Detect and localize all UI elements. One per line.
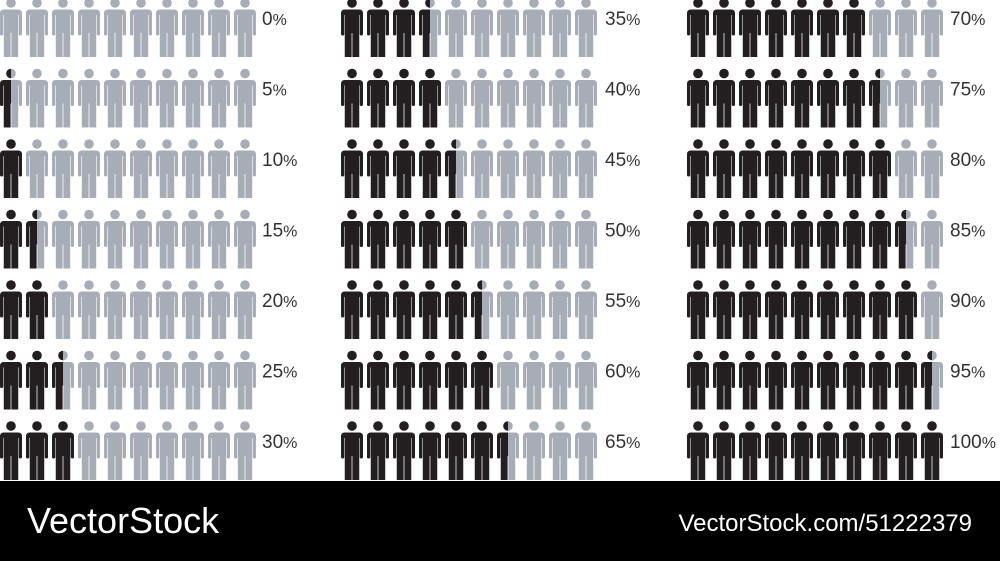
row 30% [0,421,297,480]
row 65%: 65% [605,432,640,453]
row 45%: 45% [605,150,640,171]
row 20% [0,280,297,339]
row 80% [687,139,985,198]
row 20%: 20% [262,291,297,312]
row 90% [687,280,985,339]
row 10% [0,139,297,198]
row 75% [687,69,985,128]
row 10%: 10% [262,150,297,171]
row 75%: 75% [950,80,985,100]
row 50% [341,210,640,268]
row 70% [687,0,985,57]
column 2 [341,0,640,480]
row 95% [687,351,985,410]
row 60%: 60% [605,362,640,382]
row 45% [341,139,640,198]
row 65% [341,421,640,480]
row 55%: 55% [605,291,640,312]
row 90%: 90% [950,291,985,312]
row 40%: 40% [605,80,640,100]
row 70%: 70% [950,9,985,30]
row 15% [0,210,297,268]
row 95%: 95% [950,362,985,382]
row 5% [0,69,287,128]
row 35%: 35% [605,9,640,30]
row 100% [687,421,996,480]
row 85%: 85% [950,220,985,242]
row 80%: 80% [950,150,985,171]
column 3 [687,0,996,480]
row 35% [341,0,640,57]
row 25% [0,351,297,410]
row 25%: 25% [262,362,297,382]
row 30%: 30% [262,432,297,453]
row 100%: 100% [950,432,996,453]
row 5%: 5% [262,80,287,100]
row 15%: 15% [262,220,297,242]
row 0% [0,0,287,57]
column 1 [0,0,297,480]
footer brand: VectorStock [27,500,220,541]
row 85% [687,210,985,268]
row 55% [341,280,640,339]
row 50%: 50% [605,220,640,242]
row 0%: 0% [262,9,287,30]
row 60% [341,351,640,410]
row 40% [341,69,640,128]
footer bar [0,481,1000,561]
footer id: VectorStock.com/51222379 [678,510,972,537]
